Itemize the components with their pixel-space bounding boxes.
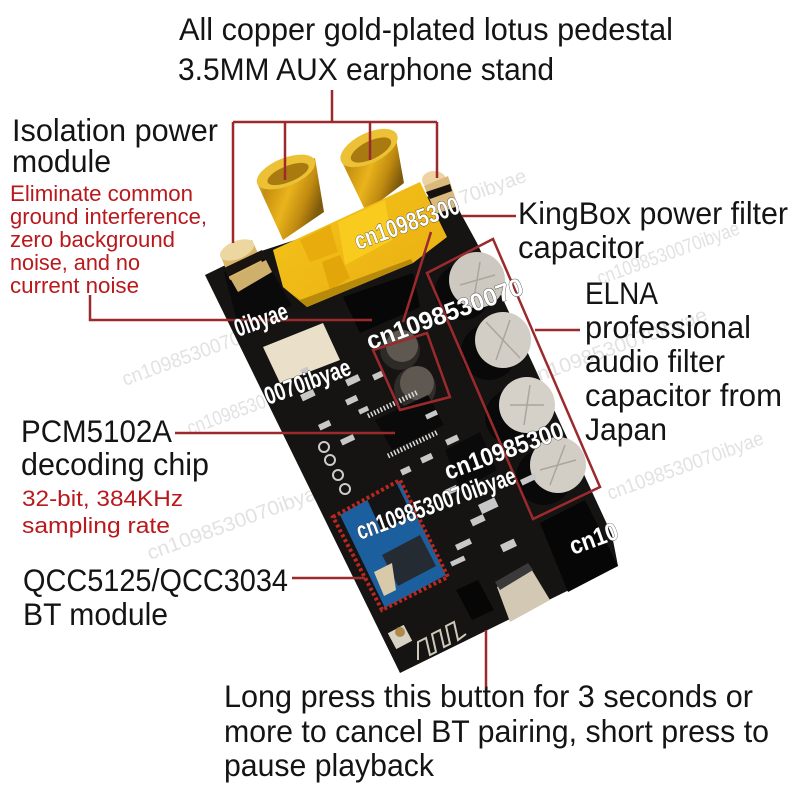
label: button: Long press this button for 3 seconds or <box>224 678 753 714</box>
label: isolation power module: module <box>12 143 111 179</box>
bright watermarks: cn1098530070ibyae <box>352 462 520 546</box>
faint background watermarks <box>119 165 767 565</box>
QCC leader <box>292 577 365 579</box>
label: isolation power module <box>10 112 218 298</box>
PCM description: sampling rate <box>22 513 170 538</box>
faint background watermarks: cn1098530070ibyae <box>524 304 710 390</box>
isolation power module <box>343 273 420 333</box>
label: isolation power module: Isolation power <box>12 112 218 148</box>
ELNA capacitors <box>435 252 586 505</box>
yellow RCA housing <box>273 182 447 307</box>
BT module <box>333 480 448 610</box>
bright watermarks: cn10985300 <box>440 417 568 486</box>
bright watermarks: 0070ibyae <box>260 354 355 411</box>
label: PCM5102A: decoding chip <box>21 446 209 482</box>
button S1 <box>456 580 494 620</box>
label: ELNA <box>585 275 782 447</box>
label: KingBox: capacitor <box>518 229 644 265</box>
label: KingBox: KingBox power filter <box>518 195 788 231</box>
antenna connector and trace <box>388 622 466 660</box>
bright watermarks <box>230 192 622 561</box>
label: button: pause playback <box>224 747 434 783</box>
label: PCM5102A: PCM5102A <box>21 413 172 449</box>
PCM leader <box>175 432 395 434</box>
label: BT module: BT module <box>23 596 168 632</box>
label: ELNA: professional <box>585 309 751 345</box>
white relay <box>263 323 340 383</box>
isolation description: Eliminate common <box>10 181 193 206</box>
bright watermarks: cn10985300 <box>350 192 463 256</box>
faint background watermarks: 70ibyae <box>456 165 529 210</box>
label: KingBox <box>518 195 788 265</box>
annotation lines <box>90 90 600 690</box>
title: lotus pedestal: 3.5MM AUX earphone stand <box>178 51 554 87</box>
PCM5102A chip <box>368 392 444 456</box>
left audio jack <box>217 235 292 332</box>
bright watermarks: 0ibyae <box>230 297 292 343</box>
right gold RCA connector <box>335 121 404 212</box>
label: BT module <box>23 562 288 632</box>
label: button: more to cancel BT pairing, short press to <box>224 713 769 749</box>
bright watermarks: cn10 <box>565 517 622 561</box>
faint background watermarks: cn1098530070ibyae <box>184 368 333 440</box>
faint background watermarks: cn1098530070ibyae <box>144 479 330 565</box>
title: lotus pedestal <box>178 11 673 87</box>
circuit board illustration <box>205 121 618 673</box>
isolation description <box>10 181 207 298</box>
regulator heat sink <box>445 432 497 490</box>
label: ELNA: ELNA <box>585 275 658 311</box>
isolation description: noise, and no <box>10 250 140 275</box>
ELNA outline and leader <box>427 239 600 519</box>
isolation line <box>90 295 372 320</box>
isolation description: zero background <box>10 227 175 252</box>
DC jack <box>540 500 618 592</box>
faint background watermarks: cn1098530070ibyae <box>604 428 767 505</box>
label: ELNA: capacitor from <box>585 377 782 413</box>
silkscreen and small components <box>300 367 537 567</box>
faint background watermarks: cn1098530070ibyae <box>119 312 286 391</box>
bright watermarks: cn1098530070 <box>362 273 527 356</box>
PCM description: 32-bit, 384KHz <box>22 486 183 511</box>
label: PCM5102A <box>21 413 209 538</box>
label: BT module: QCC5125/QCC3034 <box>23 562 288 598</box>
USB-C port <box>495 563 550 622</box>
label: ELNA: Japan <box>585 411 667 447</box>
left gold RCA connector <box>252 147 324 240</box>
label: ELNA: audio filter <box>585 343 725 379</box>
right audio jack <box>422 171 458 214</box>
isolation description: ground interference, <box>10 204 207 229</box>
small capacitor outline <box>373 333 450 410</box>
faint background watermarks: cn1098530070ibyae <box>594 218 743 290</box>
isolation description: current noise <box>10 273 139 298</box>
title: lotus pedestal: All copper gold-plated lotus pedestal <box>179 11 673 47</box>
KingBox lines <box>403 216 516 322</box>
bracket to connectors <box>233 90 437 243</box>
small filter capacitors <box>380 330 436 409</box>
PCM description <box>22 486 183 538</box>
label: button <box>224 678 769 783</box>
board PCB <box>205 190 618 673</box>
button leader <box>485 630 487 690</box>
